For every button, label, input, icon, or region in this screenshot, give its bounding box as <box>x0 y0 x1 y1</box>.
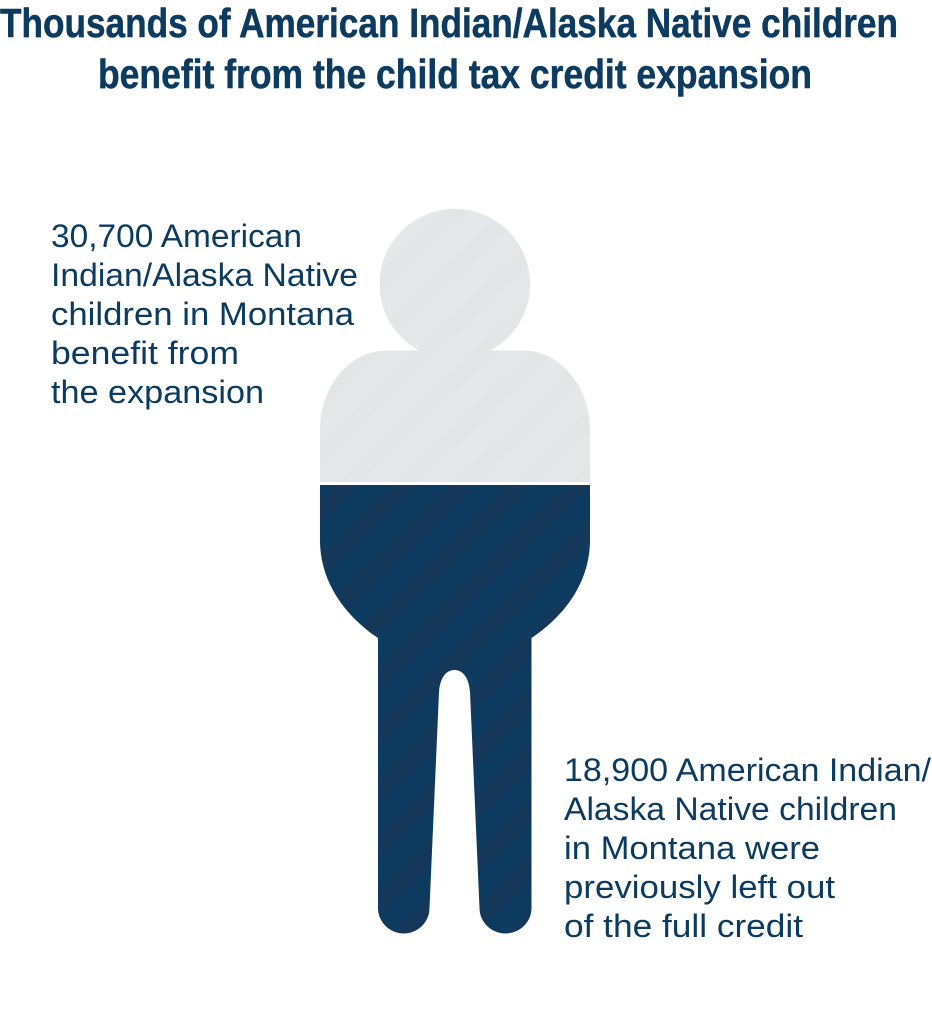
text block: children previously left out <box>564 752 931 944</box>
text block: children who benefit: the expansion <box>51 374 264 410</box>
text block: children who benefit: children in Montana <box>51 296 354 332</box>
text block: children previously left out: of the full credit <box>564 908 803 944</box>
text block: children previously left out: 18,900 American Indian/ <box>564 752 931 788</box>
text block: children who benefit: benefit from <box>51 335 239 371</box>
person upper section: gray <box>320 209 590 482</box>
title <box>0 0 898 97</box>
text block: children previously left out: previously left out <box>564 869 835 905</box>
text block: children who benefit: Indian/Alaska Native <box>51 257 358 293</box>
person icon <box>320 209 590 934</box>
person lower section: navy <box>320 485 590 934</box>
title: benefit from the child tax credit expansion <box>98 51 812 97</box>
text block: children who benefit: 30,700 American <box>51 218 302 254</box>
text block: children previously left out: Alaska Native children <box>564 791 897 827</box>
text block: children who benefit <box>51 218 358 410</box>
text block: children previously left out: in Montana were <box>564 830 820 866</box>
